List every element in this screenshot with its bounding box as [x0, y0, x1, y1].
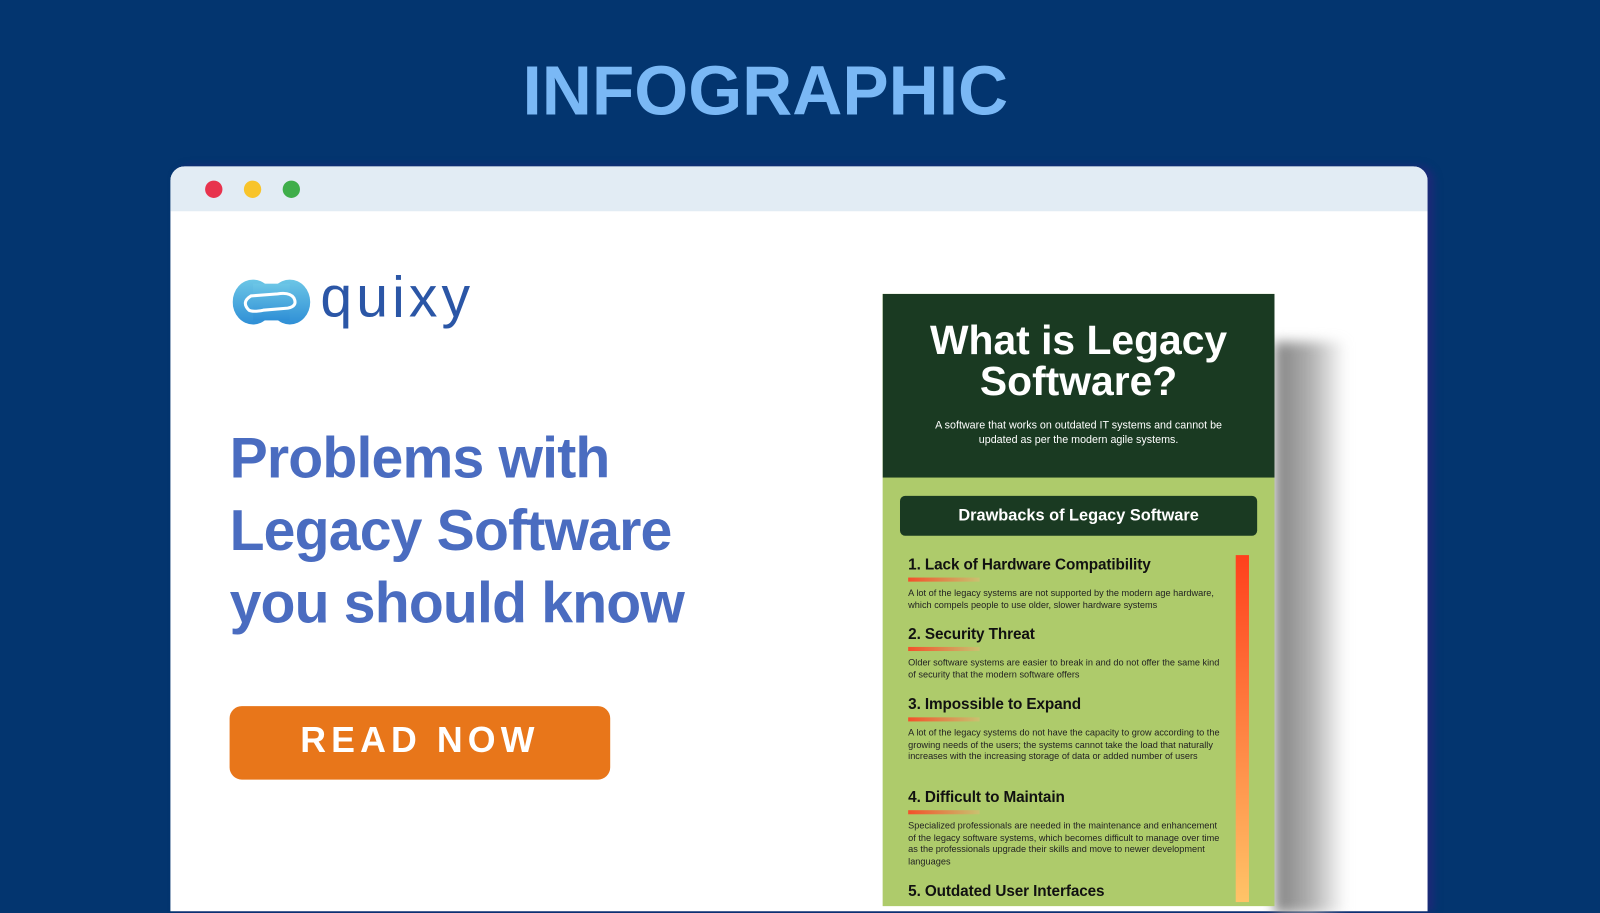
- vertical gradient bar: [1236, 555, 1249, 902]
- button: read now: READ NOW: [300, 720, 540, 760]
- header block: What is Legacy: [930, 318, 1227, 363]
- item 1: A lot of the legacy systems are not supported by the modern age hardware, which compels people to use older, slower hardware systems: [908, 588, 1214, 610]
- item 3: 3. Impossible to Expand: [908, 696, 1081, 713]
- drawbacks heading box: Drawbacks of Legacy Software: [958, 507, 1199, 524]
- logo: quixy: [232, 264, 474, 329]
- item 4: [908, 789, 1219, 866]
- item 1: [908, 556, 1214, 610]
- item 3: A lot of the legacy systems do not have the capacity to grow according to the growing needs of the users; the systems cannot take the load that naturally increases with the increasing storage of data or added number of users: [908, 728, 1220, 761]
- drawbacks heading box: [900, 496, 1257, 536]
- heading: problems with legacy software: Problems with: [230, 426, 610, 490]
- heading: problems with legacy software: Legacy Software: [230, 498, 671, 562]
- button: read now: [230, 706, 610, 780]
- header block: [883, 294, 1274, 478]
- header block: Software?: [980, 359, 1177, 404]
- item 2: 2. Security Threat: [908, 626, 1035, 643]
- header block: updated as per the modern agile systems.: [979, 434, 1178, 446]
- item 3: [908, 696, 1220, 761]
- item 1: 1. Lack of Hardware Compatibility: [908, 556, 1151, 573]
- item 4: 4. Difficult to Maintain: [908, 789, 1065, 806]
- header block: A software that works on outdated IT systems and cannot be: [935, 419, 1222, 432]
- shadow behind infographic: [1274, 342, 1346, 913]
- title: INFOGRAPHIC: [522, 52, 1008, 130]
- logo: quixy: quixy: [320, 264, 474, 329]
- item 5: 5. Outdated User Interfaces: [908, 883, 1104, 900]
- heading: problems with legacy software: you should know: [230, 570, 684, 635]
- item 4: Specialized professionals are needed in the maintenance and enhancement of the legacy software systems, which becomes difficult to manage over time as the professionals upgrade their skills and move to newer development languages: [908, 820, 1219, 866]
- panel: infographic preview: [883, 294, 1274, 906]
- item 2: [908, 626, 1219, 680]
- heading: problems with legacy software: [230, 426, 685, 635]
- browser window: [170, 166, 1428, 911]
- item 2: Older software systems are easier to break in and do not offer the same kind of security that the modern software offers: [908, 657, 1219, 679]
- browser top bar: [170, 166, 1428, 211]
